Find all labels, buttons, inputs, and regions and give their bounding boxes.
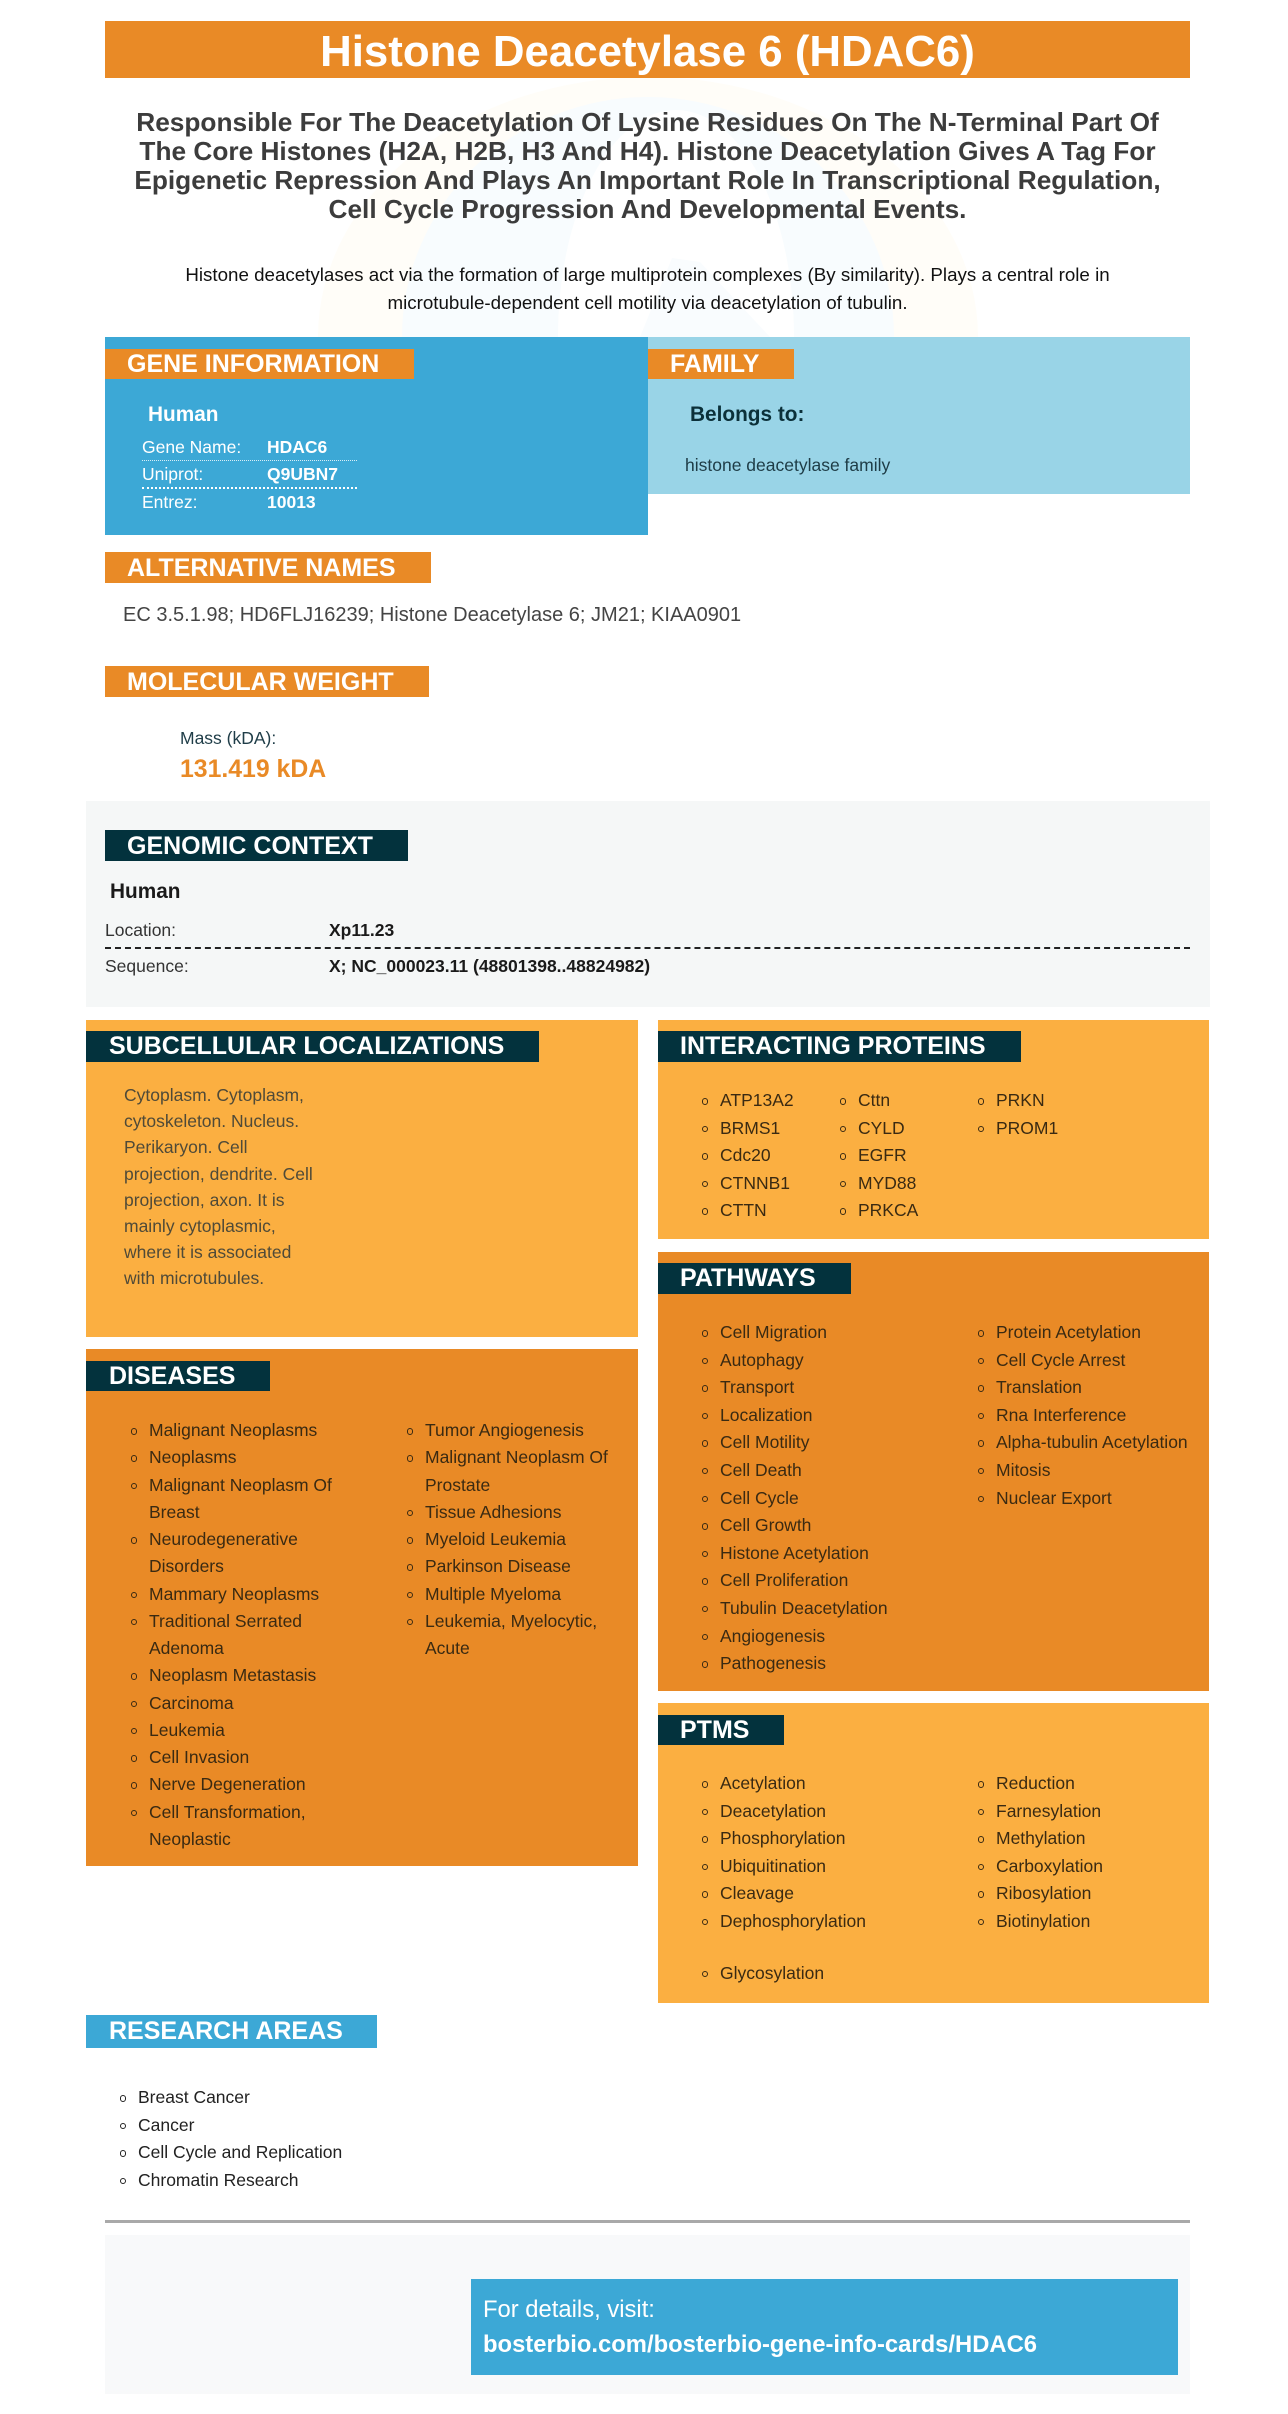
title banner xyxy=(105,21,1190,78)
pathway list column 2: Alpha-tubulin Acetylation xyxy=(996,1432,1188,1452)
sequence row: Sequence: xyxy=(105,956,189,976)
localization text: mainly cytoplasmic, xyxy=(124,1216,276,1236)
gene table: Uniprot: xyxy=(142,464,203,484)
research areas list: Breast Cancer xyxy=(138,2087,250,2107)
ptm list column 2: Reduction xyxy=(996,1773,1075,1793)
heading: research areas xyxy=(86,2015,377,2048)
alternative names text: EC 3.5.1.98; HD6FLJ16239; Histone Deacetylase 6; JM21; KIAA0901 xyxy=(123,604,741,626)
disease list column 2: Prostate xyxy=(425,1474,490,1494)
pathway list column 1 xyxy=(702,1322,888,1673)
disease list column 1: Malignant Neoplasm Of xyxy=(149,1474,332,1494)
disease list column 1: Traditional Serrated xyxy=(149,1611,302,1631)
disease list column 1: Disorders xyxy=(149,1556,224,1576)
pathway list column 1: Localization xyxy=(720,1405,812,1425)
disease list column 1: Neurodegenerative xyxy=(149,1529,298,1549)
ptm list column 1 xyxy=(702,1773,866,1983)
ptm list column 1: Deacetylation xyxy=(720,1801,826,1821)
ptm list column 1: Phosphorylation xyxy=(720,1828,846,1848)
title banner: Histone Deacetylase 6 (HDAC6) xyxy=(320,27,975,76)
panel: interacting proteins xyxy=(658,1020,1209,1239)
protein list column 2: CYLD xyxy=(858,1118,905,1138)
disease list column 1: Neoplastic xyxy=(149,1829,231,1849)
ptm list column 2: Biotinylation xyxy=(996,1911,1090,1931)
protein list column 3: PRKN xyxy=(996,1090,1045,1110)
location row: Xp11.23 xyxy=(329,920,394,940)
panel: ptms xyxy=(658,1703,1209,2003)
localization text: projection, axon. It is xyxy=(124,1190,284,1210)
species: human: Human xyxy=(148,403,218,426)
pathway list column 1: Autophagy xyxy=(720,1350,804,1370)
disease list column 1 xyxy=(131,1420,332,1849)
summary heading: The Core Histones (H2A, H2B, H3 And H4). Histone Deacetylation Gives A Tag For xyxy=(139,136,1156,166)
pathway list column 1: Cell Cycle xyxy=(720,1488,799,1508)
heading: pathways: PATHWAYS xyxy=(680,1264,816,1292)
heading: subcellular localizations: SUBCELLULAR LOCALIZATIONS xyxy=(109,1032,504,1060)
location row: Location: xyxy=(105,920,176,940)
panel: diseases xyxy=(86,1349,638,1866)
protein list column 2: EGFR xyxy=(858,1145,907,1165)
ptm list column 2: Methylation xyxy=(996,1828,1086,1848)
gene table: Q9UBN7 xyxy=(267,464,338,484)
species: human: Human xyxy=(110,880,180,903)
protein list column 2 xyxy=(840,1090,918,1220)
gene table xyxy=(142,437,357,512)
disease list column 1: Carcinoma xyxy=(149,1692,234,1712)
research areas list: Cancer xyxy=(138,2115,194,2135)
gene table: Entrez: xyxy=(142,492,197,512)
ptm list column 2: Carboxylation xyxy=(996,1856,1103,1876)
sequence row xyxy=(105,956,650,976)
protein list column 1: CTNNB1 xyxy=(720,1173,790,1193)
ptm list column 2: Ribosylation xyxy=(996,1883,1091,1903)
pathway list column 1: Cell Growth xyxy=(720,1515,811,1535)
callout: details link xyxy=(471,2279,1178,2375)
ptm list column 2 xyxy=(978,1773,1103,1931)
disease list column 1: Malignant Neoplasms xyxy=(149,1420,317,1440)
pathway list column 2: Translation xyxy=(996,1377,1082,1397)
pathway list column 2: Cell Cycle Arrest xyxy=(996,1350,1125,1370)
disease list column 1: Breast xyxy=(149,1502,200,1522)
panel: pathways xyxy=(658,1252,1209,1691)
footer panel xyxy=(105,2235,1190,2394)
disease list column 2: Multiple Myeloma xyxy=(425,1584,561,1604)
protein list column 2: Cttn xyxy=(858,1090,890,1110)
disease list column 1: Nerve Degeneration xyxy=(149,1774,306,1794)
ptm list column 1: Dephosphorylation xyxy=(720,1911,866,1931)
research areas list: Chromatin Research xyxy=(138,2170,298,2190)
panel: genomic context xyxy=(86,801,1210,1007)
heading: family: FAMILY xyxy=(670,350,759,378)
pathway list column 2: Rna Interference xyxy=(996,1405,1126,1425)
gene table: Gene Name: xyxy=(142,437,241,457)
panel: family xyxy=(648,337,1190,494)
pathway list column 1: Cell Death xyxy=(720,1460,802,1480)
background watermark xyxy=(0,0,1288,337)
ptm list column 1: Cleavage xyxy=(720,1883,794,1903)
pathway list column 1: Pathogenesis xyxy=(720,1653,826,1673)
localization text: Cytoplasm. Cytoplasm, xyxy=(124,1085,304,1105)
pathway list column 2: Nuclear Export xyxy=(996,1488,1112,1508)
disease list column 1: Cell Transformation, xyxy=(149,1802,306,1822)
pathway list column 1: Cell Motility xyxy=(720,1432,809,1452)
gene table: 10013 xyxy=(267,492,316,512)
heading: ptms: PTMS xyxy=(680,1716,749,1744)
protein list column 1: ATP13A2 xyxy=(720,1090,794,1110)
protein list column 1: BRMS1 xyxy=(720,1118,780,1138)
heading: diseases xyxy=(86,1361,270,1391)
heading: genomic context: GENOMIC CONTEXT xyxy=(127,832,373,860)
pathway list column 2: Protein Acetylation xyxy=(996,1322,1141,1342)
ptm list column 2: Farnesylation xyxy=(996,1801,1101,1821)
protein list column 2: PRKCA xyxy=(858,1200,918,1220)
heading: ptms xyxy=(658,1715,784,1745)
disease list column 2: Tissue Adhesions xyxy=(425,1502,562,1522)
localization text: where it is associated xyxy=(124,1242,291,1262)
disease list column 1: Cell Invasion xyxy=(149,1747,249,1767)
protein list column 1: Cdc20 xyxy=(720,1145,771,1165)
description paragraph: microtubule-dependent cell motility via deacetylation of tubulin. xyxy=(387,292,908,313)
localization text: projection, dendrite. Cell xyxy=(124,1164,313,1184)
description paragraph: Histone deacetylases act via the formation of large multiprotein complexes (By similarity). Plays a central role in xyxy=(185,264,1110,285)
ptm list column 1: Ubiquitination xyxy=(720,1856,826,1876)
gene table: HDAC6 xyxy=(267,437,327,457)
disease list column 2: Malignant Neoplasm Of xyxy=(425,1447,608,1467)
pathway list column 2 xyxy=(978,1322,1188,1508)
summary heading: Epigenetic Repression And Plays An Important Role In Transcriptional Regulation, xyxy=(134,165,1161,195)
sequence row: X; NC_000023.11 (48801398..48824982) xyxy=(329,956,650,976)
disease list column 2: Myeloid Leukemia xyxy=(425,1529,566,1549)
localization text: with microtubules. xyxy=(124,1268,264,1288)
panel: gene information xyxy=(105,337,648,535)
pathway list column 1: Angiogenesis xyxy=(720,1626,825,1646)
localization text xyxy=(124,1085,313,1288)
location row xyxy=(105,920,394,940)
localization text: cytoskeleton. Nucleus. xyxy=(124,1111,299,1131)
description paragraph xyxy=(185,264,1110,313)
protein list column 1: CTTN xyxy=(720,1200,767,1220)
heading: diseases: DISEASES xyxy=(109,1362,235,1390)
protein list column 3: PROM1 xyxy=(996,1118,1058,1138)
family name: histone deacetylase family xyxy=(685,455,890,475)
panel: subcellular localizations xyxy=(86,1020,638,1337)
protein list column 2: MYD88 xyxy=(858,1173,916,1193)
disease list column 2: Acute xyxy=(425,1638,470,1658)
pathway list column 1: Histone Acetylation xyxy=(720,1543,869,1563)
pathway list column 1: Cell Proliferation xyxy=(720,1570,848,1590)
heading: molecular weight: MOLECULAR WEIGHT xyxy=(127,668,394,696)
disease list column 1: Adenoma xyxy=(149,1638,224,1658)
pathway list column 2: Mitosis xyxy=(996,1460,1050,1480)
disease list column 2 xyxy=(407,1420,608,1658)
protein list column 3 xyxy=(978,1090,1058,1138)
pathway list column 1: Transport xyxy=(720,1377,794,1397)
ptm list column 1: Glycosylation xyxy=(720,1963,824,1983)
disease list column 1: Leukemia xyxy=(149,1720,225,1740)
summary heading: Responsible For The Deacetylation Of Lysine Residues On The N-Terminal Part Of xyxy=(136,107,1159,137)
disease list column 1: Mammary Neoplasms xyxy=(149,1584,319,1604)
mass value: 131.419 kDA xyxy=(180,756,326,783)
ptm list column 1: Acetylation xyxy=(720,1773,806,1793)
localization text: Perikaryon. Cell xyxy=(124,1137,248,1157)
disease list column 2: Leukemia, Myelocytic, xyxy=(425,1611,597,1631)
disease list column 2: Parkinson Disease xyxy=(425,1556,571,1576)
protein list column 1 xyxy=(702,1090,794,1220)
callout label: For details, visit: xyxy=(483,2296,655,2323)
pathway list column 1: Cell Migration xyxy=(720,1322,827,1342)
callout url: bosterbio.com/bosterbio-gene-info-cards/HDAC6 xyxy=(483,2331,1037,2358)
disease list column 1: Neoplasms xyxy=(149,1447,237,1467)
summary heading xyxy=(134,107,1161,224)
disease list column 2: Tumor Angiogenesis xyxy=(425,1420,584,1440)
mass label: Mass (kDA): xyxy=(180,728,276,748)
summary heading: Cell Cycle Progression And Developmental Events. xyxy=(328,194,966,224)
disease list column 1: Neoplasm Metastasis xyxy=(149,1665,316,1685)
heading: gene information: GENE INFORMATION xyxy=(127,350,379,378)
heading: alternative names: ALTERNATIVE NAMES xyxy=(127,554,396,582)
heading: interacting proteins: INTERACTING PROTEINS xyxy=(680,1032,986,1060)
pathway list column 1: Tubulin Deacetylation xyxy=(720,1598,888,1618)
heading: pathways xyxy=(658,1263,851,1294)
heading: family xyxy=(648,349,794,379)
belongs to label: Belongs to: xyxy=(690,403,804,426)
heading: research areas: RESEARCH AREAS xyxy=(109,2017,343,2045)
research areas list: Cell Cycle and Replication xyxy=(138,2142,342,2162)
research areas list xyxy=(120,2087,342,2190)
